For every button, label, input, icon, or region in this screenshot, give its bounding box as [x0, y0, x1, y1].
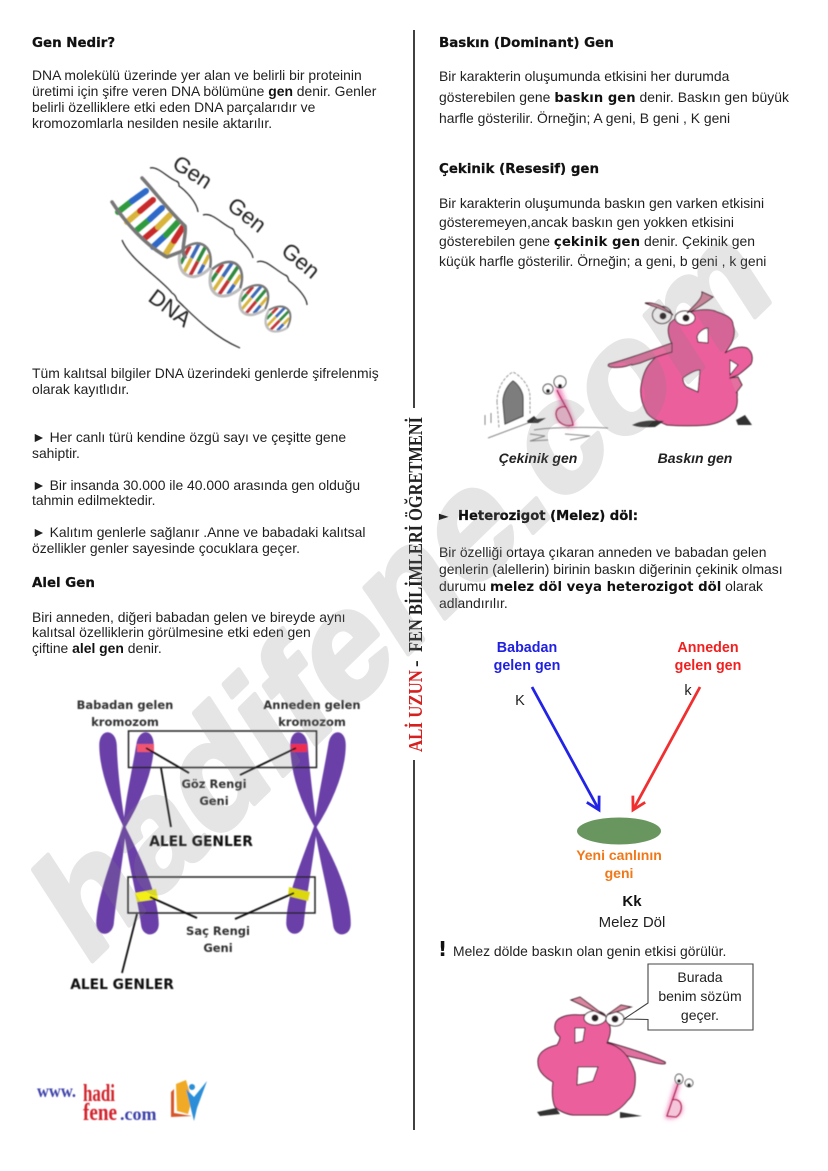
chromosome labels: Saç Rengi	[186, 924, 250, 938]
connector lines	[122, 748, 296, 973]
vertical author text: ALİ UZUN	[403, 670, 427, 752]
logo: hadifene.com: fene	[83, 1100, 117, 1126]
mother label	[675, 640, 741, 674]
callout	[624, 964, 753, 1030]
chromosome labels: Geni	[199, 794, 229, 808]
text block: gen definition	[32, 67, 377, 131]
diagram: DNA: Gen	[223, 192, 271, 238]
text block: heterozygote	[439, 544, 783, 611]
text block: alel gen: Biri anneden, diğeri babadan gelen ve bireyde aynı	[32, 609, 346, 625]
logo: hadifene.com: hadi	[83, 1081, 115, 1107]
center divider bottom	[413, 760, 415, 1130]
text block: alel gen	[32, 609, 346, 656]
chromosome labels: kromozom	[91, 715, 159, 729]
vertical author text	[403, 417, 427, 752]
text block: alel gen: çiftine alel gen denir.	[32, 640, 162, 656]
note mark: !	[438, 937, 447, 961]
braces	[122, 168, 307, 348]
text block: hereditary info: Tüm kalıtsal bilgiler DNA üzerindeki genlerde şifrelenmiş	[32, 365, 379, 381]
text block: gen definition: belirli özelliklere etki eden DNA parçalarıdır ve	[32, 99, 316, 115]
bullet list: ► Her canlı türü kendine özgü sayı ve çeşitte gene	[32, 429, 346, 445]
illustration: B and b characters	[537, 997, 693, 1118]
text block: heterozygote: genlerin (alellerin) birinin baskın diğerinin çekinik olması	[439, 561, 783, 577]
text block: recessive: küçük harfle gösterilir. Örneğin; a geni, b geni , k geni	[439, 252, 766, 269]
heading: Heterozigot: ►	[439, 509, 449, 523]
offspring label: Yeni canlının	[576, 847, 662, 863]
father label	[494, 640, 560, 674]
text block: recessive	[439, 195, 766, 269]
bullet list: sahiptir.	[32, 445, 80, 461]
arrow: blue	[532, 687, 599, 810]
small d character	[557, 387, 573, 427]
diagram: DNA: DNA	[144, 284, 196, 332]
offspring label: geni	[605, 865, 633, 881]
chromosome labels: Babadan gelen	[77, 698, 173, 712]
big B	[538, 997, 665, 1115]
text block: heterozygote: durumu melez döl veya heterozigot döl olarak	[439, 578, 763, 595]
text block: gen definition: üretimi için şifre veren DNA bölümüne gen denir. Genler	[32, 83, 377, 99]
right chromosome	[287, 733, 350, 934]
illustration: dominant and recessive characters	[485, 292, 752, 441]
center divider top	[413, 30, 415, 408]
chromosome labels: kromozom	[278, 715, 346, 729]
ladder strands	[112, 178, 185, 257]
text block: dominant: gösterebilen gene baskın gen denir. Baskın gen büyük	[439, 89, 789, 106]
small b	[668, 1082, 680, 1116]
chromosome labels: Geni	[203, 941, 233, 955]
vertical author text: FEN BİLİMLERİ ÖĞRETMENİ	[403, 417, 427, 652]
text block: heterozygote: Bir özelliği ortaya çıkaran anneden ve babadan gelen	[439, 544, 766, 560]
chromosome labels: ALEL GENLER	[149, 834, 253, 850]
mother label: gelen gen	[675, 658, 741, 674]
text block: heterozygote: adlandırılır.	[439, 595, 508, 611]
chromosome labels: ALEL GENLER	[70, 977, 174, 993]
logo: hadifene.com: www.	[37, 1081, 76, 1101]
caption: Baskın gen: Baskın gen	[658, 450, 732, 466]
grass	[632, 415, 752, 427]
icon: book	[171, 1080, 207, 1121]
text block: gen definition: DNA molekülü üzerinde yer alan ve belirli bir proteinin	[32, 67, 362, 83]
father label: Babadan	[497, 640, 557, 656]
helix lobes	[172, 237, 218, 283]
callout: Burada	[677, 969, 723, 985]
watermark: hadifene.com	[11, 182, 794, 995]
left chromosome	[97, 733, 158, 934]
bottom box	[128, 877, 315, 913]
heading: Alel Gen: Alel Gen	[32, 576, 95, 591]
diagram: DNA: Gen	[277, 238, 325, 284]
offspring ellipse	[577, 818, 661, 844]
callout: benim sözüm	[658, 988, 742, 1004]
logo: hadifene.com: .com	[120, 1104, 156, 1124]
bullet list: ► Bir insanda 30.000 ile 40.000 arasında gen olduğu	[32, 477, 360, 493]
text block: gen definition: kromozomlarla nesilden nesile aktarılır.	[32, 115, 272, 131]
allele K: K	[515, 693, 525, 709]
big B character	[608, 292, 752, 426]
chromosome labels: Anneden gelen	[263, 698, 361, 712]
top box	[128, 731, 316, 768]
gene labels: Gen	[168, 150, 217, 194]
text block: recessive: gösteremeyen,ancak baskın gen yokken etkisini	[439, 214, 734, 230]
text block: alel gen: kalıtsal özelliklerin görülmesine etki eden gen	[32, 624, 311, 640]
heading: Gen Nedir: Gen Nedir?	[32, 36, 115, 51]
diagram: DNA	[112, 150, 325, 348]
bullet list: özellikler genler sayesinde çocuklara geçer.	[32, 540, 300, 556]
grass	[537, 1108, 642, 1118]
bullet list: ► Kalıtım genlerle sağlanır .Anne ve babadaki kalıtsal	[32, 524, 365, 540]
heading: Çekinik Gen: Çekinik (Resesif) gen	[439, 162, 599, 177]
text block: recessive: Bir karakterin oluşumunda baskın gen varken etkisini	[439, 195, 764, 211]
text block: hereditary info	[32, 365, 379, 397]
text block: hereditary info: olarak kayıtlıdır.	[32, 381, 129, 397]
diagram: gene inheritance	[494, 640, 741, 931]
gene bands	[137, 744, 154, 752]
offspring label	[576, 847, 662, 881]
door	[503, 381, 523, 424]
text block: dominant: Bir karakterin oluşumunda etkisini her durumda	[439, 68, 730, 84]
caption: Çekinik gen: Çekinik gen	[499, 450, 577, 466]
vertical author text: -	[405, 660, 427, 667]
genotype caption: Melez Döl	[599, 914, 665, 931]
text block: recessive: gösterebilen gene çekinik gen denir. Çekinik gen	[439, 233, 755, 250]
allele k: k	[684, 683, 692, 699]
heading: Baskın Gen: Baskın (Dominant) Gen	[439, 36, 614, 51]
father label: gelen gen	[494, 658, 560, 674]
note text: Melez dölde baskın olan genin etkisi görülür.	[453, 943, 726, 959]
mother label: Anneden	[677, 640, 739, 656]
diagram: chromosomes	[70, 698, 361, 993]
arrow: red	[633, 687, 700, 810]
chromosome labels	[70, 698, 361, 993]
callout: geçer.	[681, 1007, 719, 1023]
logo: hadifene.com	[37, 1080, 207, 1126]
bullet list: tahmin edilmektedir.	[32, 492, 156, 508]
bullet list	[32, 429, 365, 556]
heading: Heterozigot: Heterozigot (Melez) döl:	[458, 509, 638, 524]
genotype: Kk	[622, 893, 642, 910]
text block: dominant: harfle gösterilir. Örneğin; A geni, B geni , K geni	[439, 109, 730, 126]
text block: dominant	[439, 68, 789, 126]
chromosome labels: Göz Rengi	[181, 777, 247, 791]
